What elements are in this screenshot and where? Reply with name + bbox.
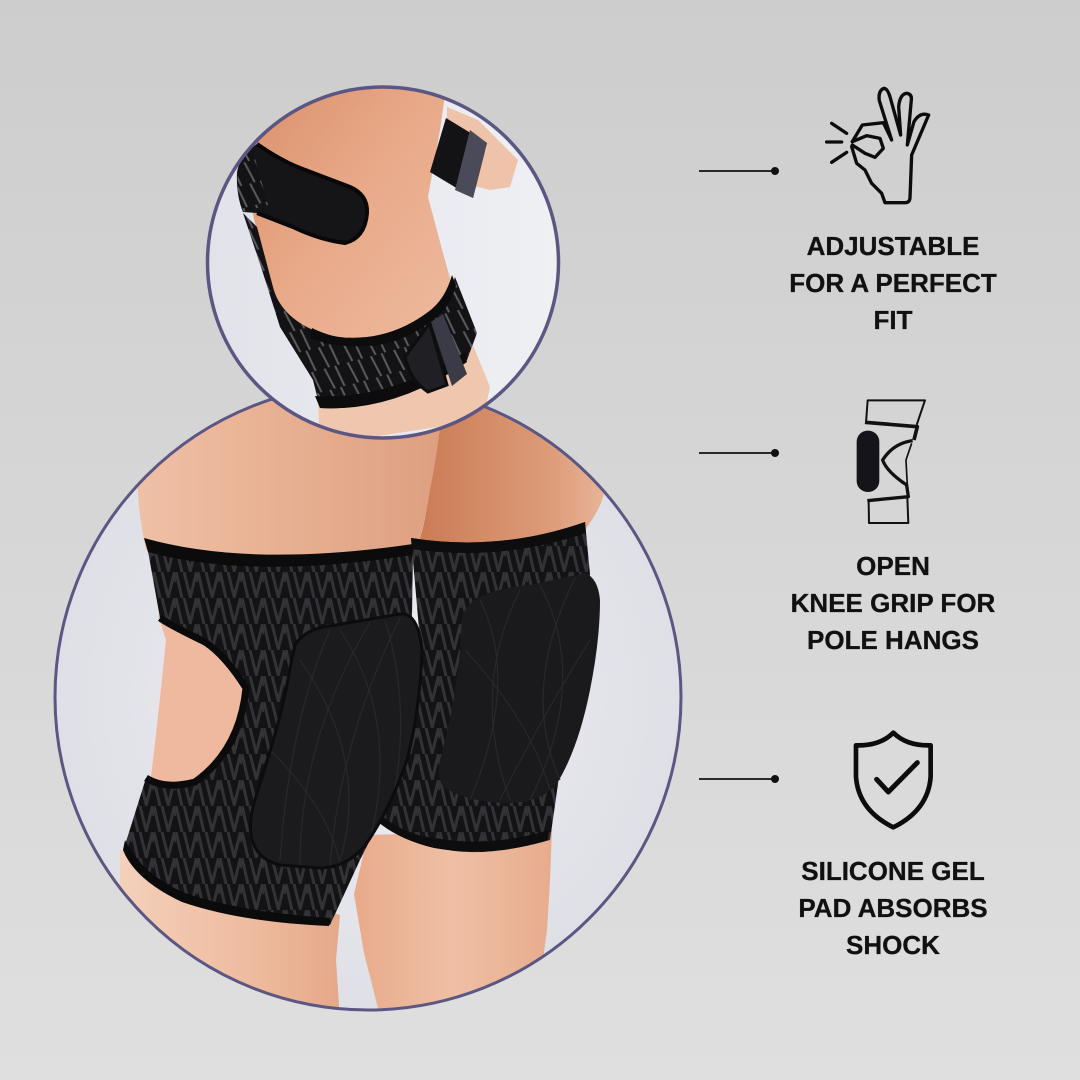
right quilted pad <box>439 573 600 803</box>
left quilted pad <box>250 614 422 868</box>
left thigh <box>136 400 440 560</box>
strap in hand <box>430 118 487 198</box>
skin seen through the knee opening <box>151 615 242 782</box>
lower band <box>243 213 477 408</box>
icon: knee brace <box>857 400 925 523</box>
feature text: silicone gel <box>798 856 988 960</box>
left brace top binding <box>144 538 413 567</box>
left shin <box>120 850 340 1020</box>
right shin <box>354 830 552 1020</box>
feature text: adjustable: ADJUSTABLE <box>807 231 979 261</box>
feature text: open knee grip: POLE HANGS <box>807 625 979 655</box>
upper strap <box>237 144 367 243</box>
hand <box>447 107 518 190</box>
photo panels and connectors <box>54 85 933 1012</box>
feature text: open knee grip <box>791 551 995 655</box>
left brace opening binding <box>146 618 246 785</box>
shin skin <box>318 345 490 445</box>
feature text: open knee grip: OPEN <box>856 551 930 581</box>
connector line 1 <box>699 167 779 175</box>
right thigh <box>412 408 604 565</box>
small circular photo: adjustable strap <box>208 80 558 445</box>
right brace <box>378 522 600 852</box>
large circular photo: both knees wearing pads <box>55 380 681 1020</box>
feature text: silicone gel: SHOCK <box>846 930 940 960</box>
strap tab and buckle <box>405 314 467 392</box>
feature text: open knee grip: KNEE GRIP FOR <box>791 588 995 618</box>
feature text: adjustable: FOR A PERFECT <box>789 268 997 298</box>
connector line 2 <box>699 449 779 457</box>
band bottom binding <box>315 352 467 408</box>
icon: OK hand gesture <box>827 88 929 203</box>
feature text: silicone gel: PAD ABSORBS <box>798 893 988 923</box>
feature text: adjustable <box>789 231 997 335</box>
band top binding <box>310 275 456 346</box>
left brace <box>123 538 422 926</box>
small circle outline <box>208 87 558 438</box>
knee skin <box>252 88 450 338</box>
feature text: adjustable: FIT <box>874 305 912 335</box>
icon: shield with check mark <box>856 733 931 827</box>
large circle outline <box>55 384 681 1010</box>
feature text: silicone gel: SILICONE GEL <box>801 856 985 886</box>
left brace bottom binding <box>123 840 330 926</box>
connector line 3 <box>699 775 779 783</box>
